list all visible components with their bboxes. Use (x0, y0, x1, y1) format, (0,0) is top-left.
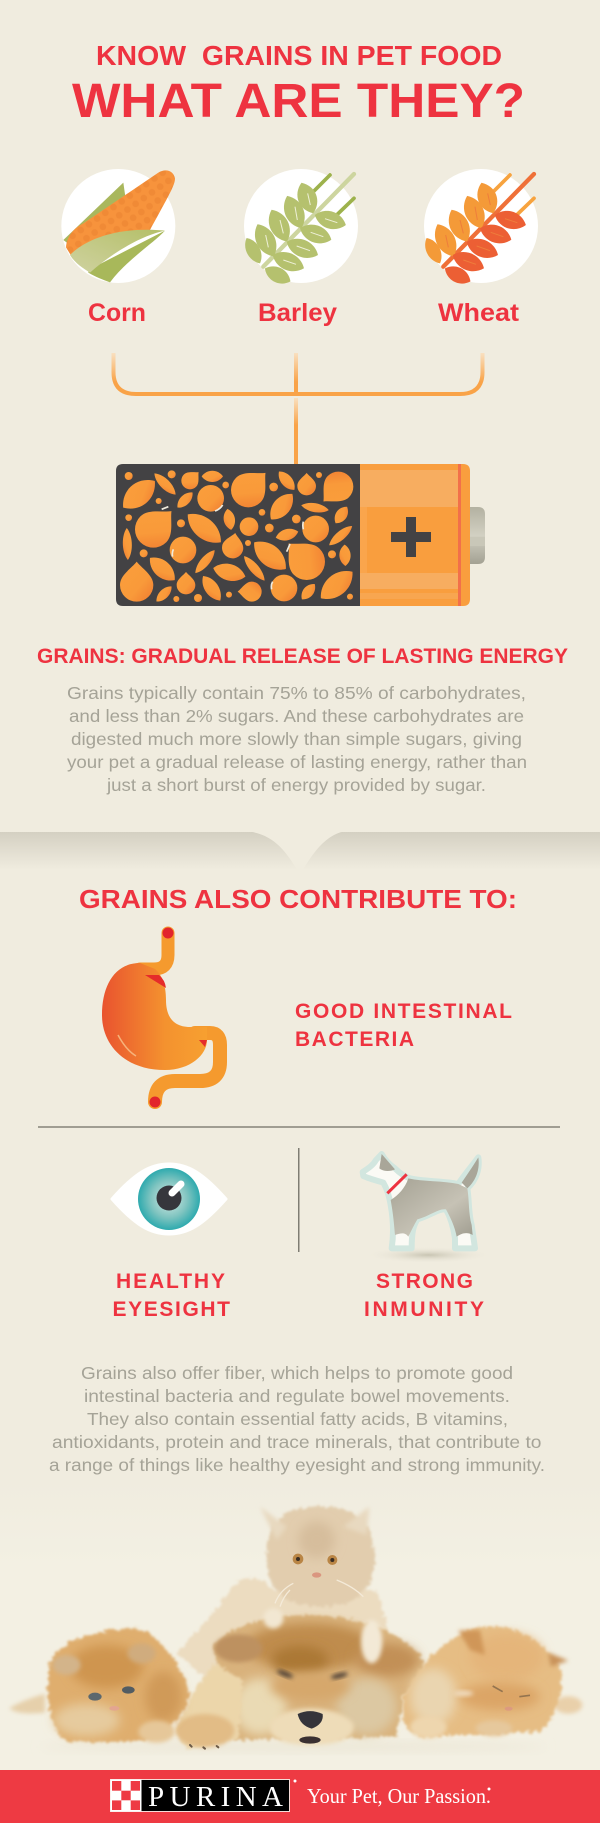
label: healthy eyesight: HEALTHY (116, 1270, 225, 1293)
battery casing (360, 464, 470, 606)
label: strong immunity: STRONG (376, 1270, 473, 1293)
icon: stomach (102, 928, 220, 1108)
grain labels: Barley (258, 299, 337, 327)
body text: carbohydrates: digested much more slowly than simple sugars, giving (71, 729, 522, 749)
plus sign (391, 517, 431, 557)
body text: carbohydrates: Grains typically contain 75% to 85% of carbohydrates, (67, 683, 526, 703)
footer bar (0, 1770, 600, 1823)
icon: corn (61, 169, 175, 283)
title (72, 40, 525, 128)
body text: fiber and nutrients: Grains also offer fiber, which helps to promote good (81, 1363, 513, 1383)
label: good intestinal bacteria (295, 1000, 512, 1051)
checkerboard (110, 1780, 142, 1812)
top kitten body (177, 1577, 390, 1680)
body text: fiber and nutrients: They also contain essential fatty acids, B vitamins, (87, 1409, 508, 1429)
label: healthy eyesight: EYESIGHT (112, 1298, 230, 1321)
grain labels: Wheat (438, 299, 520, 327)
icon: battery (116, 461, 485, 606)
label: good intestinal bacteria: GOOD INTESTINAL (295, 1000, 512, 1023)
body text: carbohydrates (67, 683, 527, 795)
left kitten (9, 1628, 190, 1743)
label: good intestinal bacteria: BACTERIA (295, 1028, 414, 1051)
icon: dog (363, 1154, 492, 1263)
logo: Purina: PURINA (148, 1781, 283, 1813)
grain labels: Corn (88, 299, 146, 327)
label: strong immunity: INMUNITY (364, 1298, 484, 1321)
icon: barley (241, 169, 358, 288)
body text: fiber and nutrients (49, 1363, 545, 1475)
seed compartment (116, 461, 360, 606)
heading: also contribute: GRAINS ALSO CONTRIBUTE TO: (79, 884, 517, 914)
body text: carbohydrates: and less than 2% sugars. And these carbohydrates are (69, 706, 524, 726)
body text: carbohydrates: just a short burst of energy provided by sugar. (106, 775, 486, 795)
battery terminal (468, 507, 485, 564)
icon: wheat (421, 169, 538, 288)
right kitten (402, 1626, 582, 1738)
icon: eye (112, 1164, 226, 1234)
section divider band (0, 831, 600, 874)
label: healthy eyesight (112, 1270, 230, 1321)
title: KNOW GRAINS IN PET FOOD (96, 40, 502, 71)
dog foreleg and paw (176, 1663, 243, 1749)
bracket connector (114, 353, 482, 464)
label: strong immunity (364, 1270, 484, 1321)
tagline: Your Pet, Our Passion. (307, 1784, 491, 1808)
body text: carbohydrates: your pet a gradual release of lasting energy, rather than (67, 752, 527, 772)
top kitten head and paws (260, 1507, 382, 1663)
dog (213, 1615, 423, 1745)
grain labels (88, 299, 520, 327)
heading: gradual release: GRAINS: GRADUAL RELEASE OF LASTING ENERGY (37, 645, 568, 668)
body text: fiber and nutrients: antioxidants, protein and trace minerals, that contribute to (52, 1432, 542, 1452)
logo: Purina (110, 1780, 296, 1813)
illustration: dog and three kittens (9, 1507, 582, 1751)
body text: fiber and nutrients: intestinal bacteria and regulate bowel movements. (84, 1386, 510, 1406)
body text: fiber and nutrients: a range of things like healthy eyesight and strong immunity. (49, 1455, 545, 1475)
title: WHAT ARE THEY? (72, 75, 525, 128)
